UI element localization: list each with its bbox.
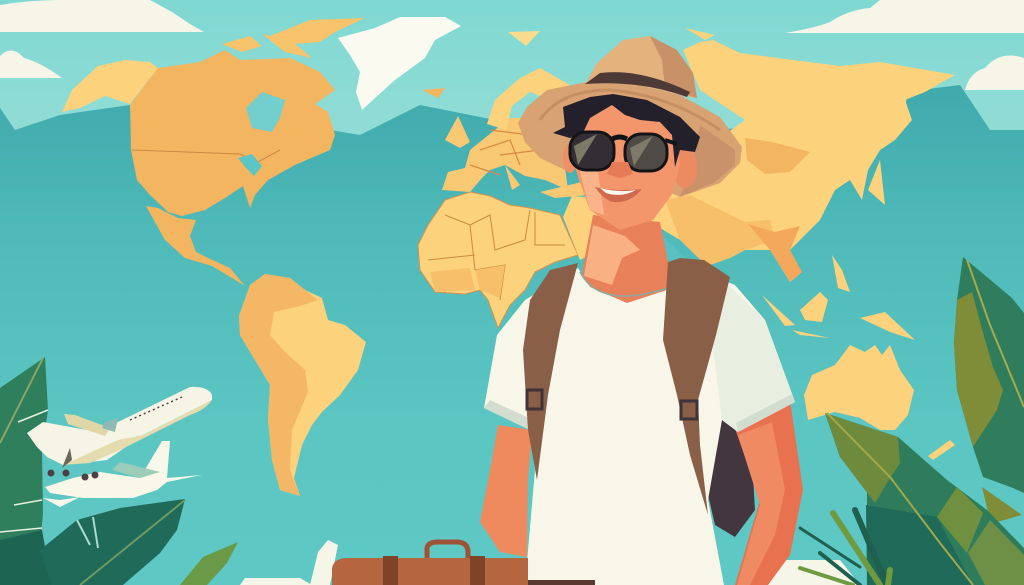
man: face — [570, 98, 680, 230]
map: islands — [422, 28, 955, 460]
man: left backpack strap — [523, 263, 578, 480]
man: mouth — [595, 187, 642, 202]
map: south america — [239, 274, 366, 496]
map: europe — [442, 31, 590, 198]
man: backpack — [700, 400, 755, 537]
map: africa — [418, 192, 578, 328]
man: nose — [607, 162, 633, 178]
man: hat crown — [585, 36, 697, 98]
man: right ear — [673, 148, 697, 188]
map: greenland — [338, 17, 461, 110]
surf and ground — [240, 540, 860, 585]
man: hat brim — [518, 82, 742, 197]
map: australia — [804, 345, 914, 430]
man: neck highlight — [584, 225, 640, 285]
man: belt — [527, 580, 595, 585]
leaf: small olive — [982, 487, 1022, 522]
leaf: right tall — [954, 257, 1024, 493]
clouds — [0, 0, 1024, 90]
airplane: front — [27, 387, 212, 480]
map: north america — [62, 18, 365, 286]
man: neck — [582, 215, 684, 320]
leaf: left tall — [0, 357, 52, 585]
man: sunglasses — [570, 132, 677, 171]
man: right backpack strap — [663, 258, 730, 515]
man: right arm — [732, 400, 803, 585]
man: left arm — [480, 425, 532, 557]
suitcase — [332, 542, 528, 585]
leaf: small green — [180, 542, 238, 585]
leaf: left bottom — [40, 499, 185, 585]
map: asia — [563, 40, 955, 282]
man: t-shirt — [484, 263, 795, 585]
strap buckles — [527, 390, 697, 419]
man: left ear — [563, 143, 577, 173]
man: hair — [553, 94, 700, 167]
man: hat front brim edge — [540, 90, 720, 130]
leaf: right bottom — [825, 413, 1024, 585]
leaf: fronds — [800, 510, 890, 585]
airplane: rear — [43, 441, 202, 507]
face highlight — [578, 165, 604, 215]
